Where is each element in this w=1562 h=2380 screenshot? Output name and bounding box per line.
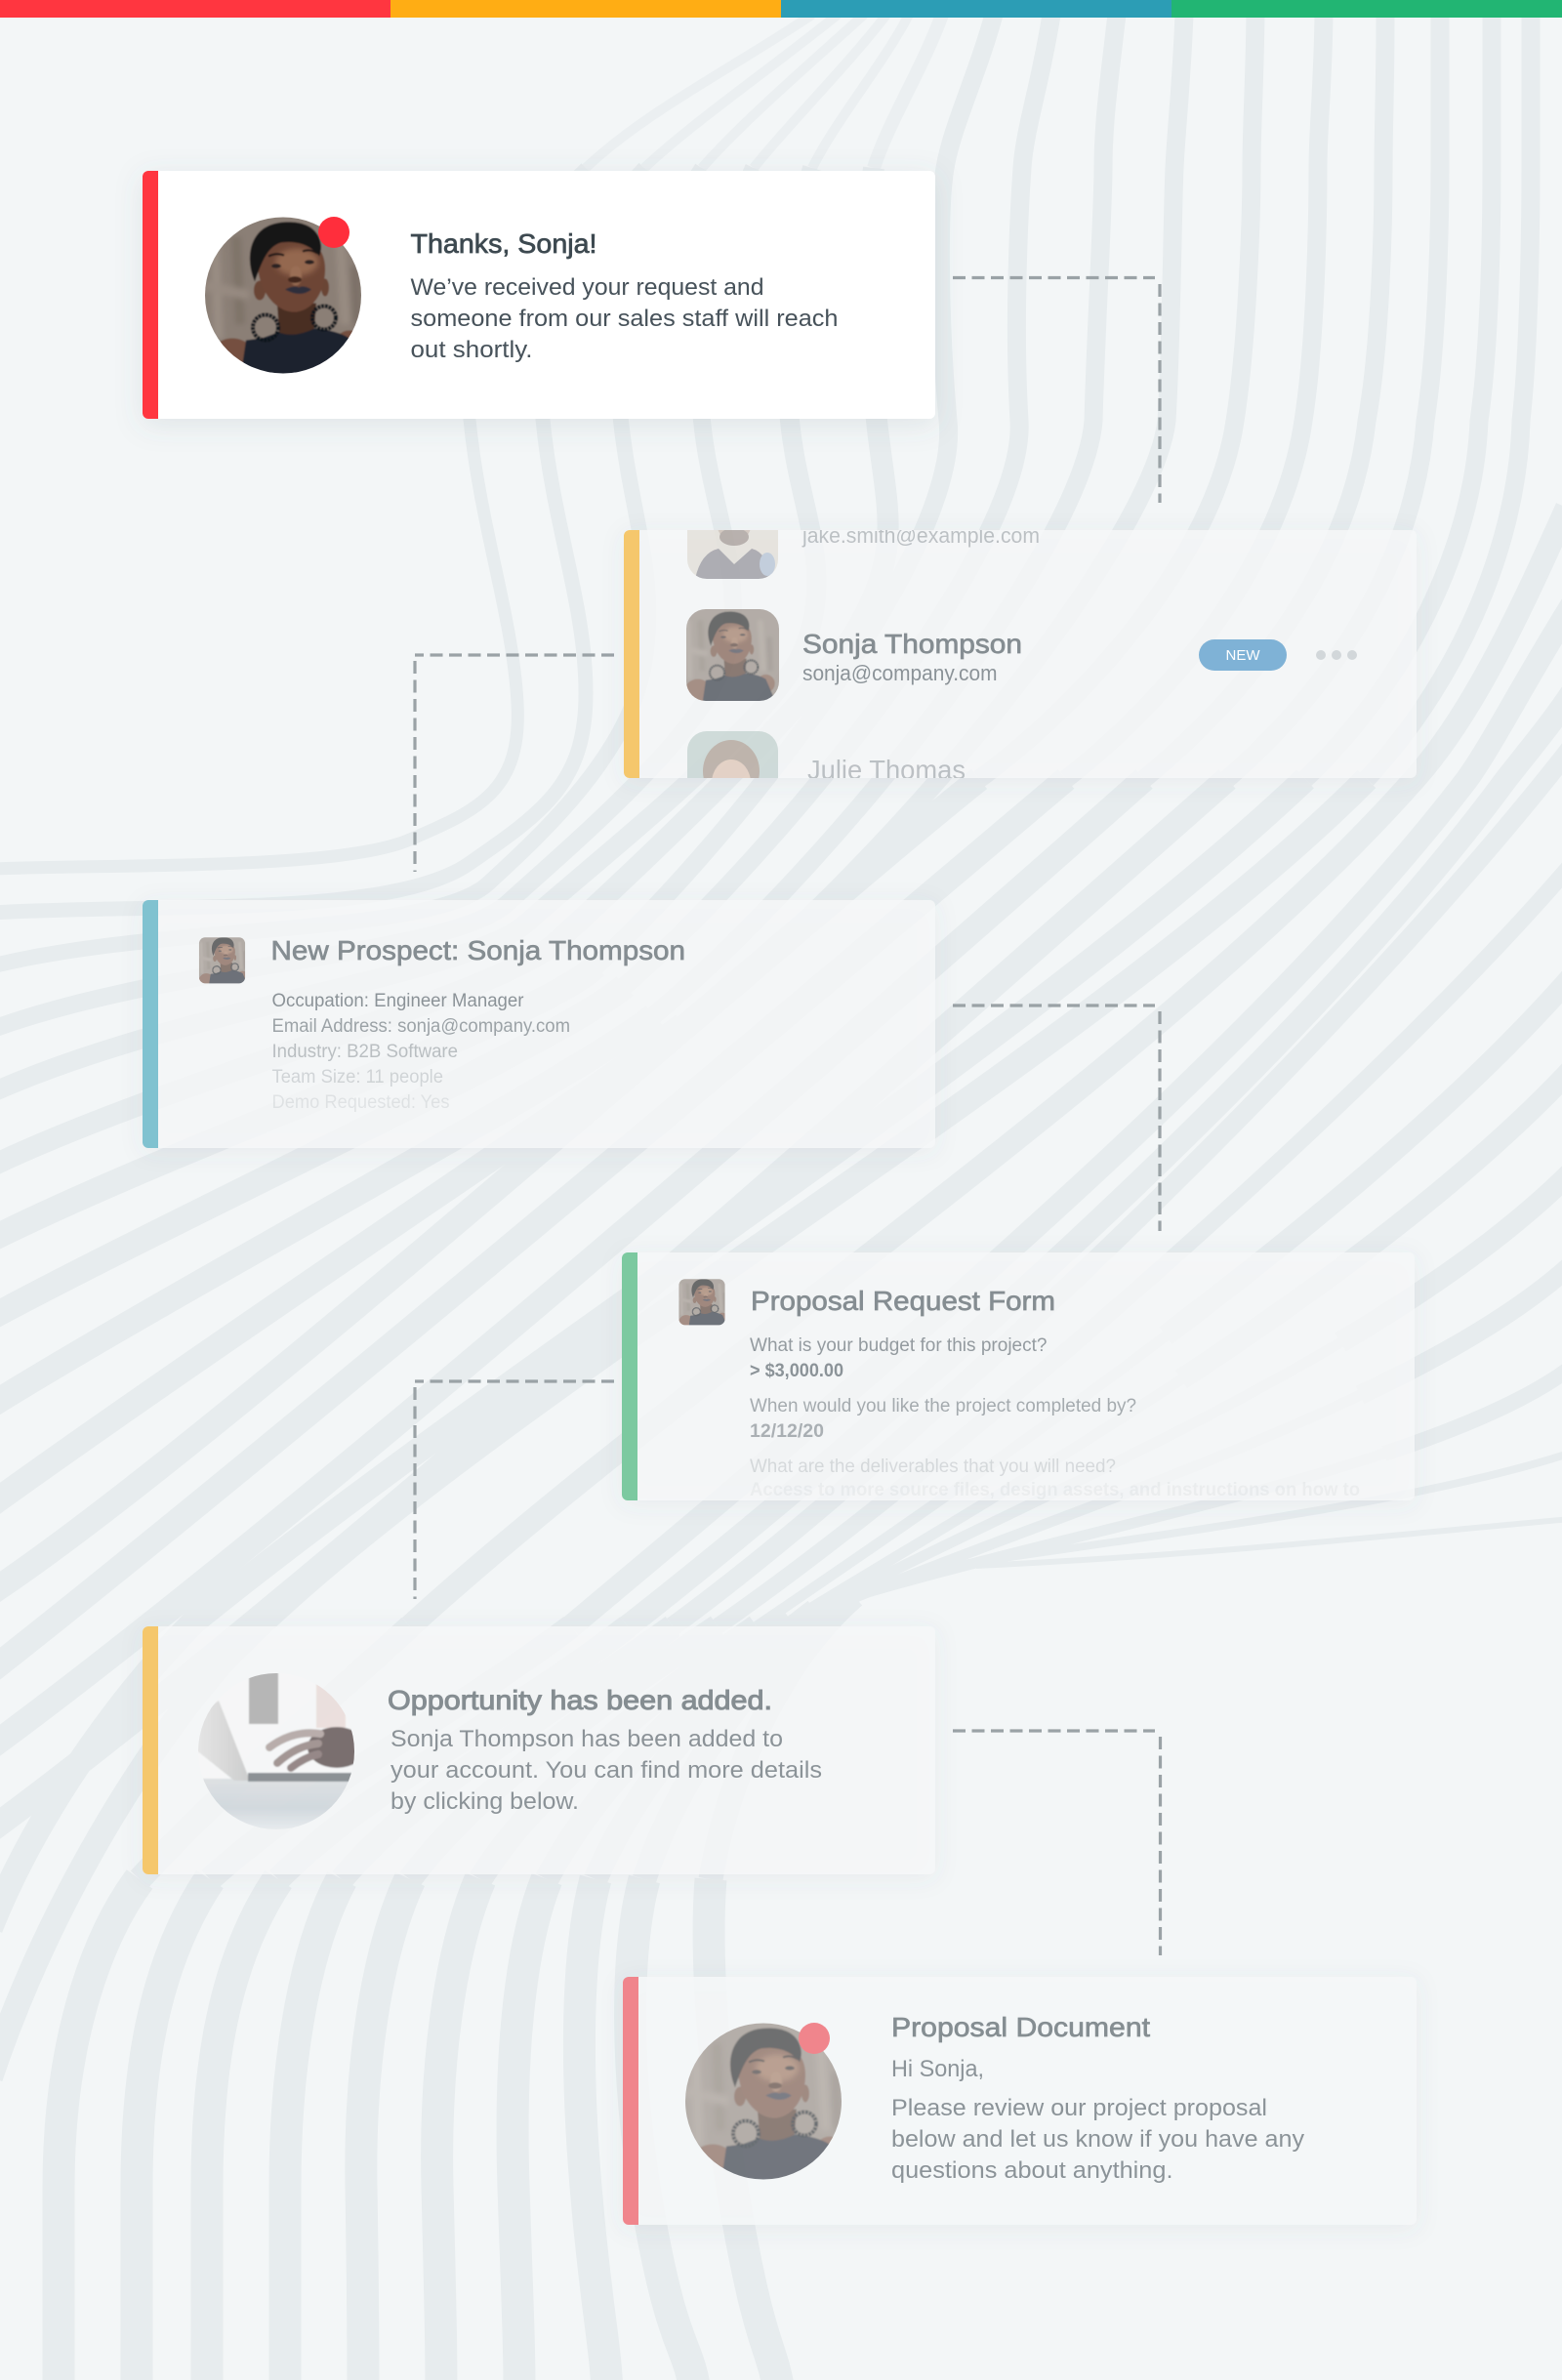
form questions and answers: When would you like the project completed by?: [750, 1396, 1136, 1416]
panel: proposal request form: [622, 1252, 1415, 1500]
card background: [623, 1977, 1417, 2225]
body text: [410, 274, 838, 363]
teal accent bar: [143, 900, 158, 1148]
connector: card 2 to card 3: [415, 655, 614, 872]
heading: Proposal Request Form: [751, 1286, 1055, 1316]
body text: Sonja Thompson has been added to: [390, 1726, 783, 1752]
avatar: Sonja: [686, 609, 779, 701]
heading: Proposal Document: [891, 2012, 1150, 2042]
card background: [143, 900, 935, 1148]
form questions and answers: 12/12/20: [750, 1421, 824, 1442]
card background: [624, 530, 1417, 778]
body text: Please review our project proposal: [891, 2095, 1267, 2121]
yellow accent bar: [143, 1626, 158, 1874]
avatar: Sonja small: [199, 937, 246, 984]
prospect details: Demo Requested: Yes: [271, 1092, 449, 1113]
body text: We’ve received your request and: [410, 274, 763, 301]
panel: opportunity added: [143, 1626, 840, 1874]
red accent bar: [623, 1977, 638, 2225]
NEW badge: [1199, 639, 1287, 671]
heading: Opportunity has been added.: [388, 1685, 772, 1715]
notification dot: [799, 2023, 830, 2054]
avatar: Julie: [687, 731, 778, 778]
prospect details: Email Address: sonja@company.com: [271, 1016, 570, 1037]
body text: your account. You can find more details: [390, 1757, 822, 1784]
contact name: Sonja: Sonja Thompson: [802, 629, 1022, 659]
contact name: Julie: Julie Thomas: [807, 755, 966, 785]
body text: below and let us know if you have any: [891, 2126, 1304, 2153]
form questions and answers: What are the deliverables that you will need?: [750, 1457, 1116, 1477]
form questions and answers: Access to more source files, design assets, and instructions on how to: [750, 1480, 1360, 1500]
heading: New Prospect: Sonja Thompson: [271, 935, 685, 965]
notification dot: [318, 217, 349, 248]
card background: [622, 1252, 1415, 1500]
connector: card 1 to card 2: [953, 277, 1160, 503]
red accent bar: [143, 171, 158, 419]
panel: thanks message: [140, 171, 938, 428]
green accent bar: [622, 1252, 637, 1500]
avatar: Sonja small: [678, 1279, 725, 1326]
body text: questions about anything.: [891, 2157, 1173, 2184]
card background: [143, 1626, 935, 1874]
prospect details: Industry: B2B Software: [271, 1042, 458, 1062]
connector: card 3 to card 4: [953, 1005, 1160, 1231]
body text: [891, 2056, 1304, 2184]
top colour bar: [0, 0, 1562, 18]
list rows: [686, 530, 1357, 778]
contact email: Sonja: sonja@company.com: [802, 661, 998, 685]
body text: out shortly.: [410, 337, 533, 363]
more menu dots: [1316, 650, 1357, 660]
prospect details: Occupation: Engineer Manager: [271, 991, 524, 1011]
body text: someone from our sales staff will reach: [410, 306, 838, 332]
NEW badge: NEW: [1226, 647, 1260, 664]
panel: contact list: [624, 530, 1417, 778]
avatar: Jake: [687, 530, 778, 579]
avatar: Sonja: [205, 217, 361, 373]
panel: new prospect: [143, 900, 935, 1148]
form questions and answers: What is your budget for this project?: [750, 1335, 1047, 1356]
form questions and answers: [750, 1335, 1360, 1500]
yellow accent bar: [624, 530, 639, 778]
body text: [390, 1726, 822, 1815]
form questions and answers: > $3,000.00: [750, 1361, 843, 1381]
prospect details: Team Size: 11 people: [271, 1067, 443, 1087]
connector: card 5 to card 6: [953, 1731, 1160, 1955]
heading: Thanks, Sonja!: [410, 228, 597, 259]
connector: card 4 to card 5: [415, 1381, 614, 1599]
body text: Hi Sonja,: [891, 2056, 984, 2082]
panel: proposal document: [623, 1977, 1304, 2225]
prospect details: [271, 991, 570, 1113]
avatar: Sonja: [685, 2023, 842, 2179]
photo: hands on laptop: [198, 1673, 354, 1829]
body text: by clicking below.: [390, 1788, 579, 1815]
card background: [143, 171, 935, 419]
contact email: Jake: jake.smith@example.com: [802, 523, 1040, 548]
